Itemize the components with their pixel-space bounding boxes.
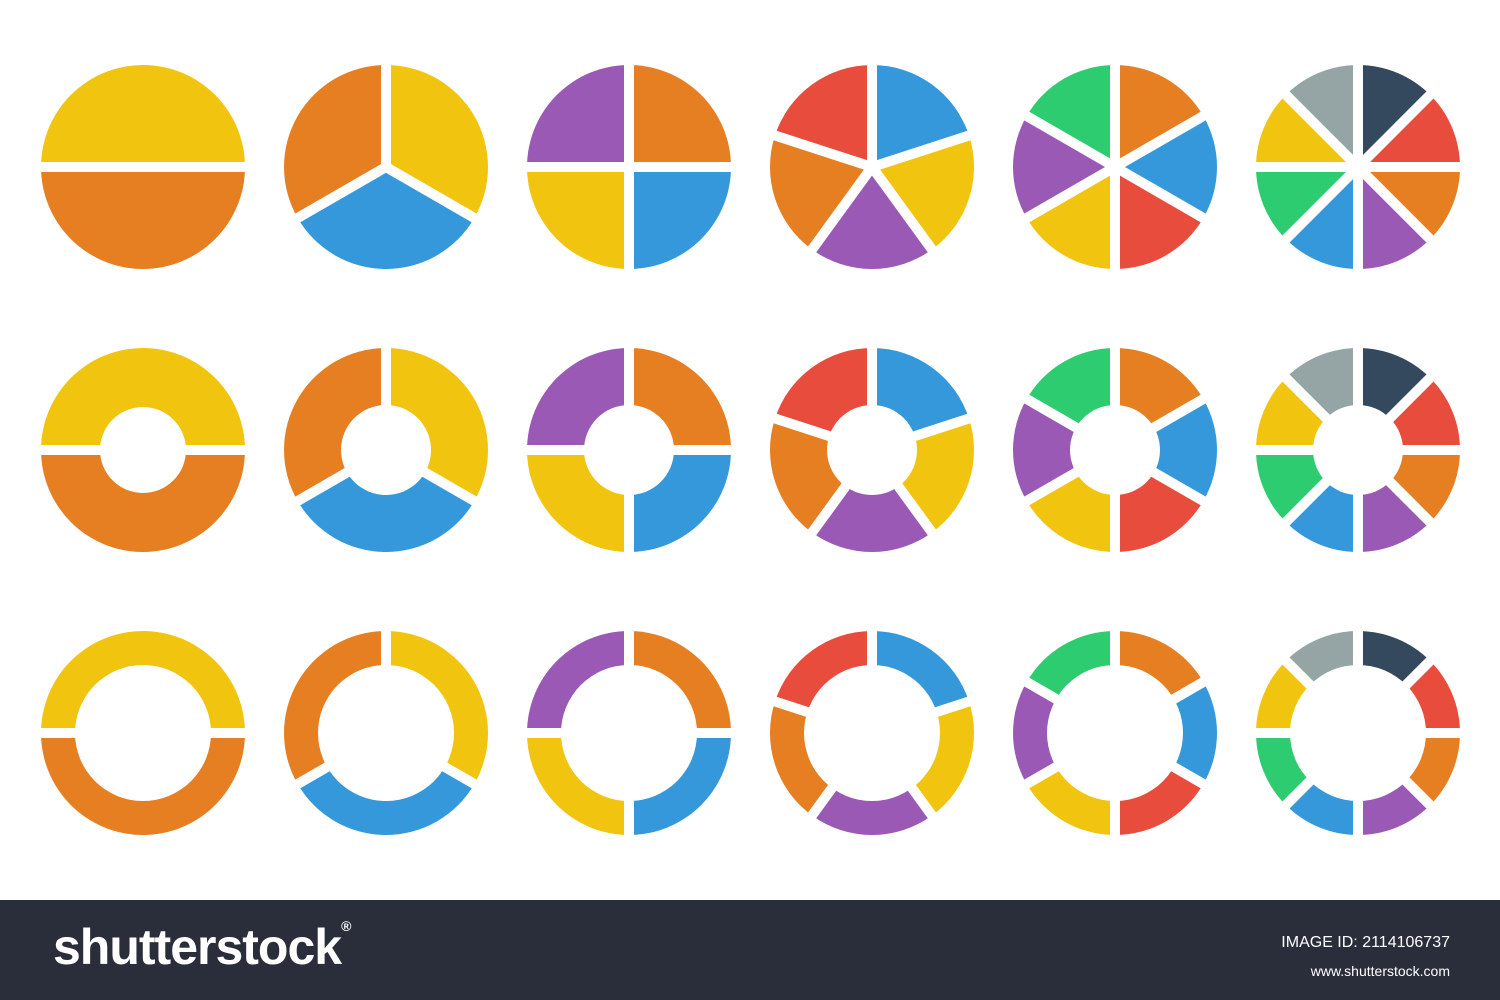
row 3: thin rings (33, 606, 1481, 873)
footer bar (0, 900, 1500, 1000)
image id text (1281, 934, 1450, 979)
row 2: thick donuts (33, 323, 1481, 590)
footer logo: shutterstock® (53, 918, 350, 975)
image id text: www.shutterstock.com (1311, 963, 1450, 979)
row 1: pies (33, 40, 1481, 307)
image id text: IMAGE ID: 2114106737 (1281, 934, 1450, 951)
